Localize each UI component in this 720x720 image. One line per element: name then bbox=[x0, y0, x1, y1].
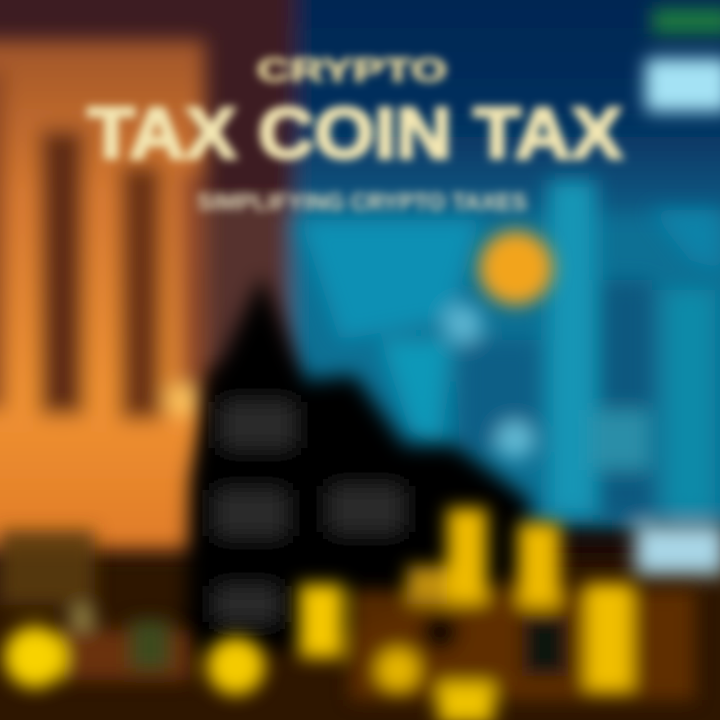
panel: digital blue streaks bbox=[300, 180, 720, 575]
panel: top right badge bbox=[645, 8, 720, 112]
icon: gold coin bbox=[479, 231, 553, 305]
subtitle: SIMPLIFYING CRYPTO TAXES bbox=[197, 189, 527, 216]
panel: orange building with columns bbox=[0, 40, 205, 550]
heading: small kicker: CRYPTO bbox=[257, 52, 447, 88]
panel: dark pyramid stat cards bbox=[185, 275, 530, 650]
panel: gold coin stacks bbox=[0, 508, 695, 720]
title: TAX COIN TAX bbox=[88, 94, 622, 174]
